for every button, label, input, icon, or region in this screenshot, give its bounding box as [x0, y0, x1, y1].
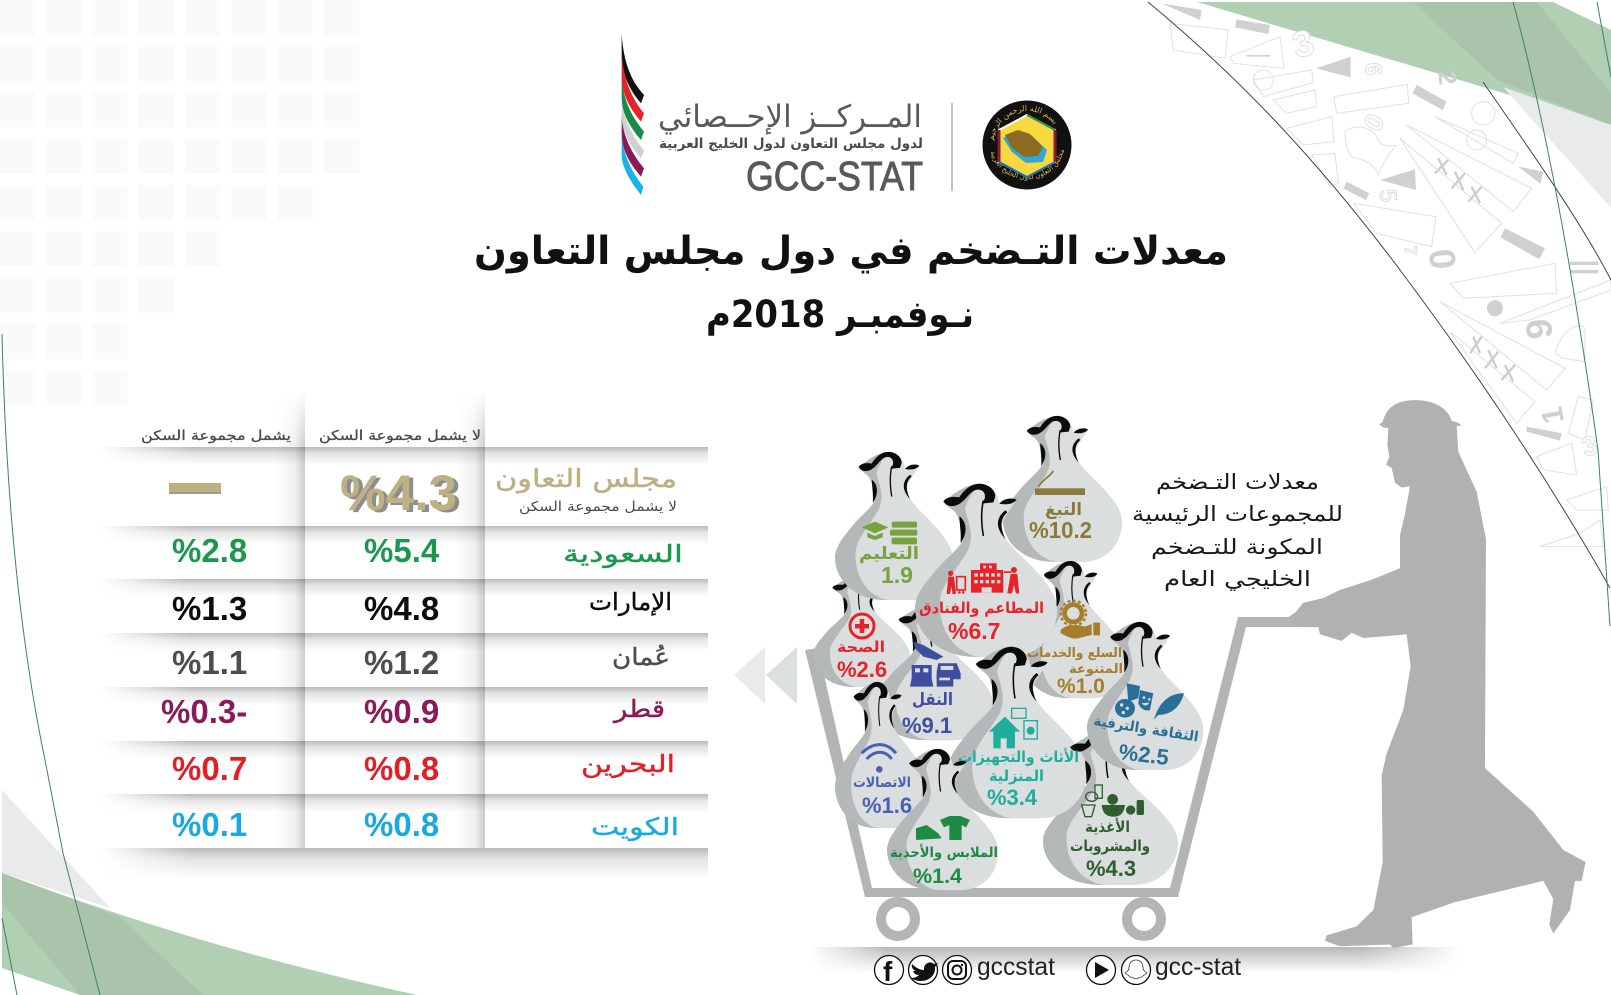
logo ribbon stripes [622, 33, 644, 195]
technical pattern top right: 6 [1360, 61, 1387, 77]
caption text [1132, 470, 1343, 591]
icon: cap and books [862, 522, 917, 544]
title [474, 229, 1228, 337]
social media footer [874, 954, 1241, 987]
title line 1: معدلات التـضخم في دول مجلس التعاون [474, 229, 1228, 274]
row: Oman: عُمان [612, 643, 670, 671]
shopping cart [805, 617, 1297, 936]
inflation table [100, 392, 708, 878]
row: GCC: %4.3 [344, 467, 461, 523]
bag: clothing and footwear: الملابس والأحذية [890, 844, 998, 861]
row: Saudi Arabia [172, 532, 683, 569]
row: Saudi Arabia: %2.8 [172, 532, 247, 569]
caption text: المكونة للتـضخم [1151, 535, 1323, 560]
icon: facebook [874, 956, 904, 987]
bag: communications: %1.6 [862, 793, 912, 818]
row: Bahrain [172, 750, 675, 787]
top right green corner [1197, 2, 1611, 208]
bag: clothing and footwear [887, 749, 998, 890]
bag: food and beverages: الأغذية [1085, 818, 1130, 836]
row: Kuwait: %0.8 [364, 806, 439, 843]
bag: education: 1.9 [881, 562, 913, 588]
bag: health: %2.6 [837, 657, 887, 682]
row: UAE [172, 588, 672, 627]
row: GCC: لا يشمل مجموعة السكن [519, 499, 677, 515]
row: Bahrain: %0.7 [172, 750, 247, 787]
icon: cigarette [1035, 471, 1085, 495]
bag: communications: الاتصالات [853, 775, 911, 791]
logo: GCC-STAT [622, 33, 952, 199]
bag: health: الصحة [837, 638, 885, 656]
row: Saudi Arabia: السعودية [563, 540, 683, 568]
bag: education: التعليم [859, 544, 919, 564]
row: GCC [169, 464, 677, 523]
icon: youtube [1086, 956, 1116, 984]
technical pattern top right: 3 [1579, 430, 1601, 462]
bag: tobacco: التبغ [1045, 500, 1082, 520]
icon: plane, ship and cars [910, 642, 961, 687]
man silhouette [1288, 400, 1586, 948]
bag: furniture and household equipment: المنزلية [989, 767, 1044, 785]
icon: food items [1082, 785, 1144, 817]
technical pattern top right: 2 [1432, 70, 1461, 86]
row: Bahrain: البحرين [581, 750, 675, 778]
row: UAE: الإمارات [589, 588, 672, 616]
bag: tobacco [1003, 416, 1122, 562]
row: Kuwait: %0.1 [172, 806, 247, 843]
bag: furniture and household equipment: الأثاث والتجهيزات [958, 748, 1079, 766]
bag: restaurants and hotels: المطاعم والفنادق [919, 599, 1044, 617]
icon: wifi [862, 745, 896, 773]
handle: gcc-stat: gcc-stat [1155, 954, 1241, 981]
bag: furniture and household equipment: %3.4 [987, 785, 1038, 810]
icon: facebook: f [883, 956, 893, 987]
icon: twitter [908, 956, 938, 984]
technical pattern top right: 5 [1375, 188, 1402, 203]
icon: masks, palette and feather [1115, 683, 1184, 720]
row: UAE: %1.3 [172, 590, 247, 627]
bag: food and beverages: %4.3 [1086, 856, 1136, 881]
bag: tobacco: %10.2 [1029, 517, 1092, 543]
row: Kuwait: الكويت [591, 813, 679, 841]
caption text: الخليجي العام [1164, 567, 1311, 591]
technical pattern top right: 0 [1358, 108, 1391, 136]
technical pattern top right: 7 [1401, 245, 1421, 256]
row: Qatar: %0.3- [161, 693, 247, 730]
icon: shoe and t-shirt [916, 816, 970, 840]
row: GCC: مجلس التعاون [495, 464, 677, 494]
technical pattern top right: 6 [1518, 317, 1560, 341]
logo arabic subtitle: لدول مجلس التعاون لدول الخليج العربية [659, 136, 923, 152]
row: Oman: %1.2 [364, 644, 439, 681]
bag: education [835, 452, 953, 600]
icon: GCC emblem: مجلس التعاون لدول الخليج العربية [991, 150, 1064, 181]
row: Qatar [161, 693, 665, 730]
technical pattern top right: 3 [1288, 21, 1318, 66]
title line 2: نـوفمبـر 2018م [706, 293, 974, 337]
bag: transport [875, 606, 993, 740]
technical pattern top right [1162, 3, 1611, 547]
row: Saudi Arabia: %5.4 [364, 532, 440, 569]
footer shadow [820, 947, 1448, 970]
icon: house, tv and washer [989, 708, 1037, 748]
row: Oman [172, 643, 670, 681]
bag: furniture and household equipment [948, 647, 1119, 818]
column header: with population group: يشمل مجموعة السكن [141, 428, 291, 444]
caption text: معدلات التـضخم [1156, 470, 1319, 495]
bag: miscellaneous goods and services: السلع والخدمات [1027, 646, 1122, 661]
bag: restaurants and hotels [915, 484, 1057, 657]
bag: recreation and culture: %2.5 [1117, 739, 1170, 770]
bag: miscellaneous goods and services [1023, 561, 1127, 698]
bag: health [813, 576, 910, 687]
background square pattern [0, 0, 372, 412]
icon: snapchat [1122, 956, 1150, 984]
row: Qatar: قطر [613, 695, 665, 723]
icon: hotel building and staff [947, 563, 1019, 594]
bag: transport: النقل [912, 690, 953, 710]
icon: gear and hand [1061, 601, 1100, 639]
decorative curves top right [1148, 2, 1611, 626]
logo arabic name: المــركــز الإحــصائي [658, 99, 922, 135]
icon: GCC emblem: بسم الله الرحمن الرحيم [991, 104, 1056, 141]
bag: food and beverages: والمشروبات [1070, 837, 1150, 855]
bag: recreation and culture: الثقافة والترفية [1092, 713, 1200, 746]
caption text: للمجموعات الرئيسية [1132, 502, 1343, 526]
row: Oman: %1.1 [172, 644, 247, 681]
row: Bahrain: %0.8 [364, 750, 439, 787]
bag: recreation and culture [1087, 622, 1203, 770]
bag: miscellaneous goods and services: %1.0 [1057, 675, 1105, 698]
row: Kuwait [172, 806, 679, 843]
bag: miscellaneous goods and services: المتنوعة [1069, 662, 1123, 677]
arrows pointing left [734, 647, 797, 704]
logo latin name: GCC-STAT [746, 153, 923, 199]
row: UAE: %4.8 [364, 590, 439, 627]
bag: clothing and footwear: %1.4 [913, 864, 962, 888]
technical pattern top right: 1 [1535, 404, 1571, 426]
row: GCC: %4.3 [340, 465, 457, 521]
bag: transport: %9.1 [902, 713, 952, 738]
bag: food and beverages [1043, 732, 1178, 885]
handle: gccstat: gccstat [977, 954, 1055, 981]
bag: restaurants and hotels: %6.7 [948, 618, 1000, 644]
icon: medical cross [850, 614, 874, 638]
row: Qatar: %0.9 [364, 693, 439, 730]
column header: without population group: لا يشمل مجموعة السكن [319, 428, 481, 444]
technical pattern top right: 0 [1421, 247, 1464, 271]
icon: instagram [942, 956, 972, 984]
bottom left green corner [2, 334, 417, 995]
icon: GCC emblem [982, 100, 1072, 190]
bag: communications [835, 682, 928, 828]
